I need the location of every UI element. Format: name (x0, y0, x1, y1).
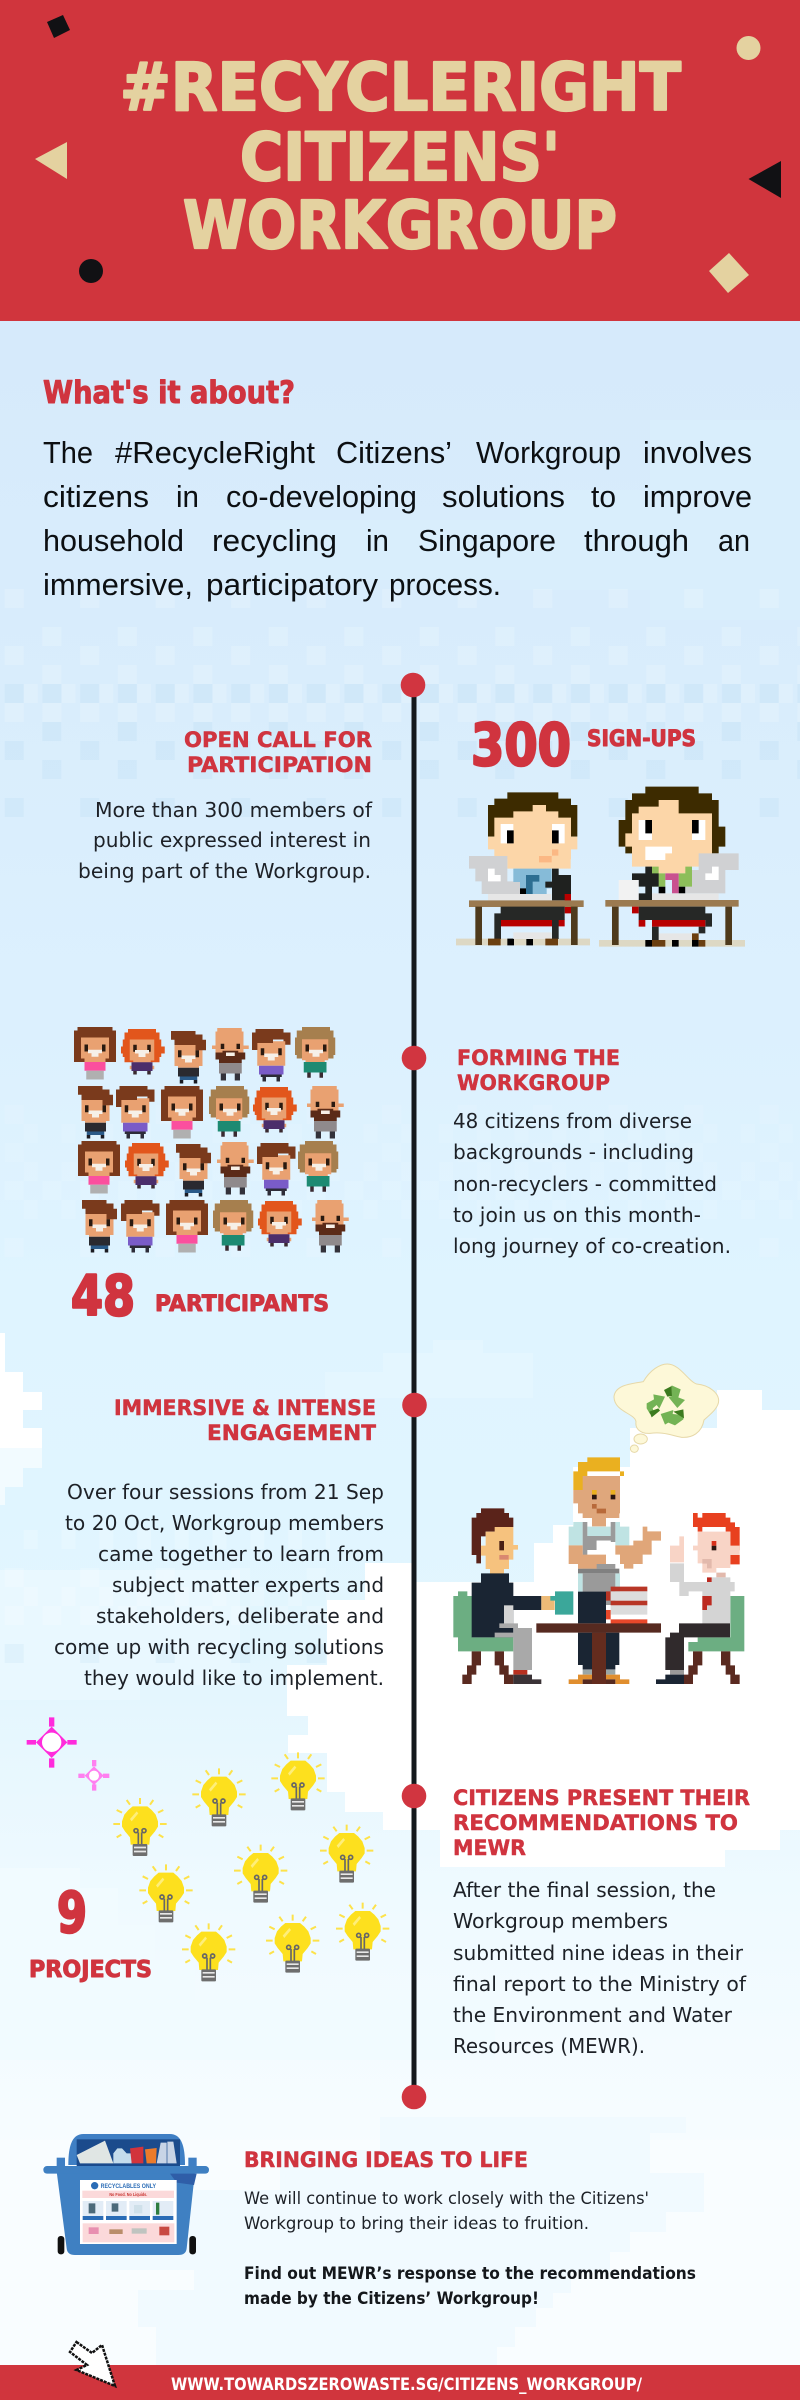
pixel man with pink tie (605, 787, 739, 947)
decorative confetti shapes (35, 15, 781, 293)
stat: 300 sign-ups: SIGN-UPS (587, 727, 696, 752)
step 1 text: open call (78, 728, 373, 883)
step 4 text: citizens present recommendations: CITIZENS PRESENT THEIR (453, 1786, 750, 1811)
intro paragraph: Citizens’ (336, 435, 452, 470)
step 3 text: immersive and intense engagement: came together to learn from (98, 1542, 384, 1566)
intro paragraph: recycling (212, 523, 337, 558)
stat: 9 projects: PROJECTS (29, 1957, 152, 1983)
step 3 text: immersive and intense engagement: come up with recycling solutions (54, 1635, 384, 1659)
step 2 text: forming the workgroup (453, 1046, 731, 1258)
step 4 text: citizens present recommendations: RECOMMENDATIONS TO (453, 1811, 738, 1836)
title: #RECYCLERIGHT (120, 49, 681, 126)
step 1 text: open call: public expressed interest in (93, 828, 371, 852)
bin sticker labels (82, 2182, 174, 2242)
bin sticker labels: RECYCLABLES ONLY (101, 2183, 156, 2190)
illustration: two pixel citizens at laptops (456, 787, 745, 947)
step 3 text: immersive and intense engagement: IMMERSIVE & INTENSE (114, 1396, 376, 1421)
step 2 text: forming the workgroup: to join us on this month- (453, 1203, 701, 1227)
pixel man right with red hair (656, 1513, 744, 1684)
stat: 9 projects: 9 (57, 1881, 87, 1946)
step 3 text: immersive and intense engagement (54, 1396, 384, 1690)
intro paragraph: participatory (206, 567, 378, 602)
footer bar with URL (0, 2365, 800, 2400)
step 4 text: citizens present recommendations: After the final session, the (453, 1878, 716, 1902)
intro paragraph: citizens (43, 479, 149, 514)
step 3 text: immersive and intense engagement: to 20 Oct, Workgroup members (65, 1511, 384, 1535)
step 3 text: immersive and intense engagement: Over four sessions from 21 Sep (67, 1480, 384, 1504)
step 4 text: citizens present recommendations: submitted nine ideas in their (453, 1941, 744, 1965)
intro paragraph: Singapore (418, 523, 556, 558)
intro paragraph: solutions (442, 479, 565, 514)
pixel man centre in apron (569, 1457, 661, 1684)
step 4 text: citizens present recommendations: Resources (MEWR). (453, 2034, 645, 2058)
title: CITIZENS' (240, 119, 560, 196)
intro paragraph: process. (389, 567, 501, 602)
stat: 48 participants: PARTICIPANTS (155, 1292, 329, 1317)
title (120, 49, 681, 264)
step 5 text: bringing ideas to life: Find out MEWR’s response to the recommendations (244, 2264, 696, 2284)
illustration: grid of pixel participants (74, 1027, 349, 1252)
step 1 text: open call: More than 300 members of (95, 798, 373, 822)
illustration: nine light bulbs (113, 1752, 389, 1981)
step 2 text: forming the workgroup: WORKGROUP (457, 1071, 610, 1096)
intro paragraph: household (43, 523, 184, 558)
step 2 text: forming the workgroup: long journey of co-creation. (453, 1234, 731, 1258)
header band (0, 0, 800, 321)
step 3 text: immersive and intense engagement: ENGAGEMENT (207, 1421, 376, 1446)
illustration: three pixel people in discussion (453, 1364, 744, 1684)
step 1 text: open call: being part of the Workgroup. (78, 859, 371, 883)
intro paragraph: Workgroup (476, 435, 621, 470)
intro paragraph: co-developing (226, 479, 417, 514)
thought bubble with recycling symbol (614, 1364, 719, 1452)
intro paragraph: through (584, 523, 689, 558)
step 5 text: bringing ideas to life: BRINGING IDEAS TO LIFE (244, 2148, 528, 2173)
stat: 300 sign-ups: 300 (471, 711, 571, 779)
stat: 9 projects (29, 1881, 152, 1983)
step 2 text: forming the workgroup: FORMING THE (457, 1046, 620, 1071)
step 1 text: open call: OPEN CALL FOR (184, 728, 372, 753)
pixel man with blue tie (469, 792, 584, 945)
intro paragraph: in (176, 479, 199, 514)
heading: what's it about: What's it about? (43, 375, 295, 411)
intro paragraph: an (718, 523, 750, 558)
footer bar with URL: WWW.TOWARDSZEROWASTE.SG/CITIZENS_WORKGROUP/ (171, 2375, 643, 2394)
intro paragraph: in (366, 523, 389, 558)
icon: pixel cursor arrow (70, 2342, 115, 2386)
table with stacked books (536, 1587, 661, 1684)
step 3 text: immersive and intense engagement: stakeholders, deliberate and (96, 1604, 384, 1628)
step 4 text: citizens present recommendations: final report to the Ministry of (453, 1972, 747, 1996)
step 4 text: citizens present recommendations (453, 1786, 750, 2058)
step 2 text: forming the workgroup: non-recyclers - committed (453, 1172, 717, 1196)
illustration: blue recycling bin (43, 2134, 209, 2255)
step 4 text: citizens present recommendations: the Environment and Water (453, 2003, 733, 2027)
icon: pink sparkles (27, 1717, 109, 1791)
intro paragraph: immersive, (43, 567, 193, 602)
step 2 text: forming the workgroup: 48 citizens from diverse (453, 1109, 692, 1133)
intro paragraph: The (43, 435, 93, 470)
pixel man left with teal mug (453, 1508, 573, 1684)
intro paragraph (43, 435, 752, 602)
step 1 text: open call: PARTICIPATION (187, 753, 372, 778)
stat: 300 sign-ups (471, 711, 696, 779)
intro paragraph: to (591, 479, 616, 514)
step 5 text: bringing ideas to life: made by the Citizens’ Workgroup! (244, 2289, 539, 2309)
step 4 text: citizens present recommendations: MEWR (453, 1836, 526, 1861)
step 3 text: immersive and intense engagement: subject matter experts and (112, 1573, 384, 1597)
timeline (401, 673, 427, 2109)
step 3 text: immersive and intense engagement: they would like to implement. (84, 1666, 384, 1690)
stat: 48 participants (71, 1264, 329, 1328)
intro paragraph: involves (643, 435, 752, 470)
step 5 text: bringing ideas to life (244, 2148, 696, 2309)
stat: 48 participants: 48 (71, 1264, 135, 1328)
step 5 text: bringing ideas to life: We will continue to work closely with the Citizens' (244, 2189, 649, 2209)
title: WORKGROUP (183, 187, 617, 264)
step 2 text: forming the workgroup: backgrounds - including (453, 1140, 694, 1164)
step 5 text: bringing ideas to life: Workgroup to bring their ideas to fruition. (244, 2214, 589, 2234)
intro paragraph: improve (643, 479, 752, 514)
step 4 text: citizens present recommendations: Workgroup members (453, 1909, 668, 1933)
intro paragraph: #RecycleRight (115, 435, 315, 470)
bin sticker labels: No Food. No Liquids. (109, 2192, 147, 2197)
